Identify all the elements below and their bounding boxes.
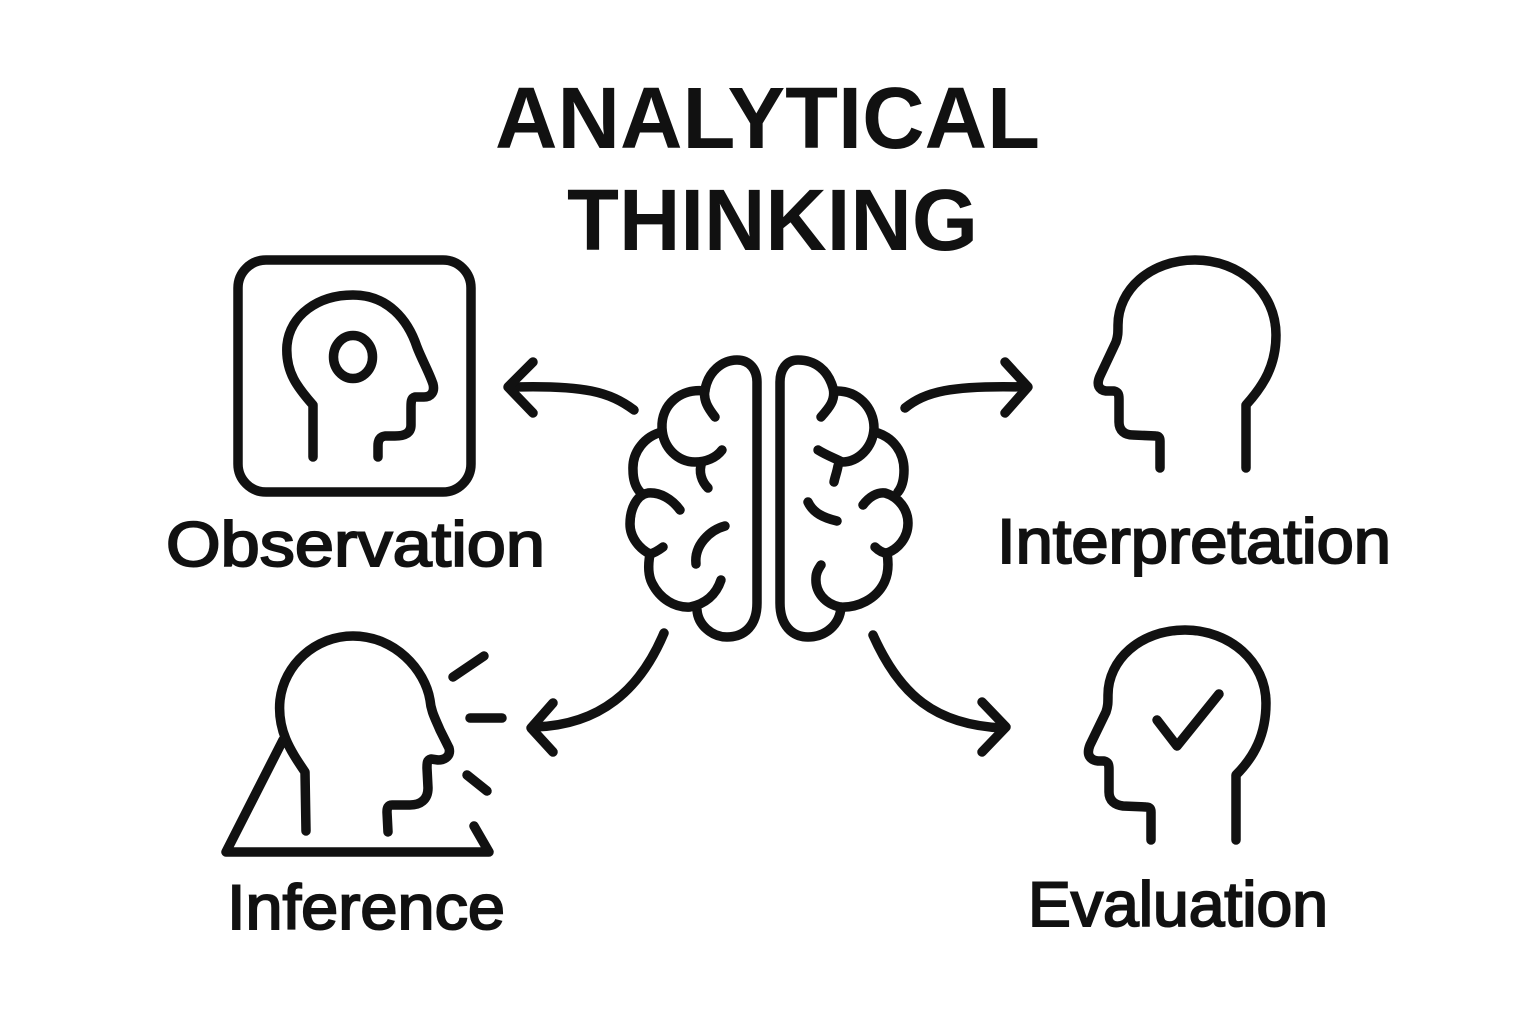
- label: interpretation: Interpretation: [997, 507, 1391, 577]
- check mark: [1157, 694, 1219, 746]
- arrow: brain to interpretation: [905, 362, 1028, 413]
- arrow: brain to inference: [531, 633, 664, 752]
- right hemisphere: [780, 360, 908, 637]
- label: observation: Observation: [166, 510, 545, 580]
- icon: observation head in rounded square: [238, 260, 471, 492]
- title: THINKING: [567, 172, 978, 269]
- title: [495, 70, 1040, 269]
- title: ANALYTICAL: [495, 70, 1040, 167]
- icon: interpretation head: [1098, 260, 1276, 468]
- icon: evaluation head with check mark: [1088, 630, 1266, 840]
- label: evaluation: Evaluation: [1028, 870, 1328, 940]
- icon: inference head with triangle and rays: [226, 636, 502, 852]
- left hemisphere: [630, 360, 757, 637]
- rays: [453, 656, 502, 791]
- arrow: brain to evaluation: [873, 635, 1006, 752]
- arrow: brain to observation: [508, 362, 634, 413]
- triangle base: [226, 740, 489, 852]
- label: inference: Inference: [227, 873, 505, 943]
- icon: central brain: [630, 360, 908, 637]
